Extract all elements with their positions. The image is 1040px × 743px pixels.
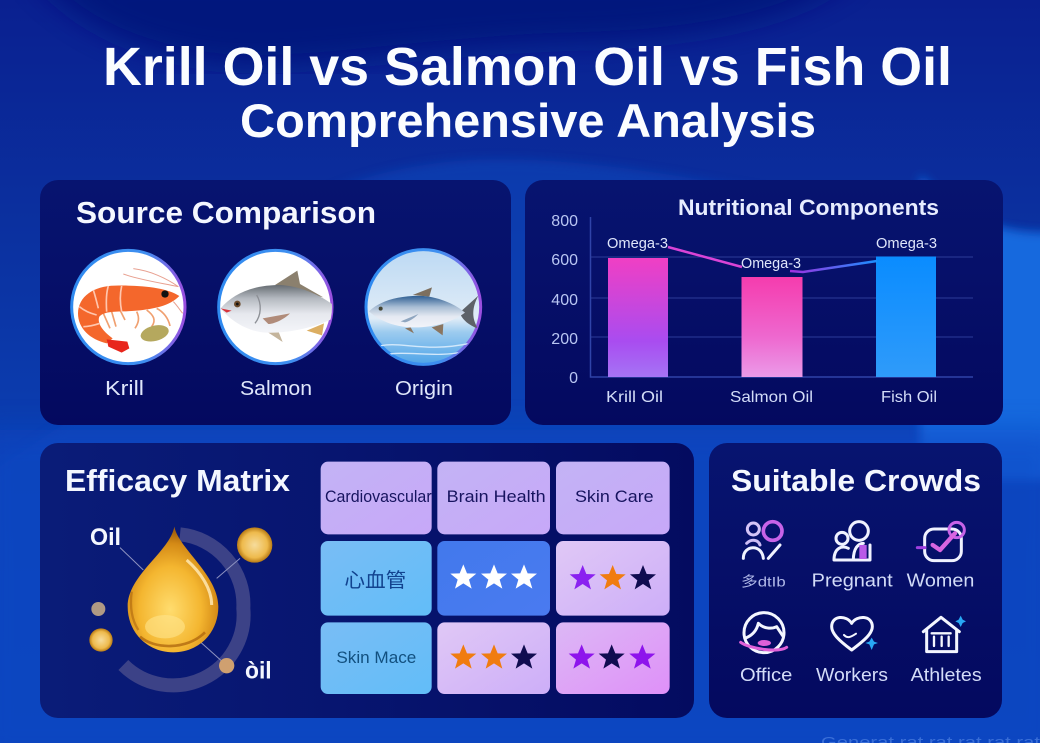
heading: efficacy matrix: Efficacy Matrix [65, 463, 291, 498]
y axis labels: 800 [551, 213, 578, 230]
matrix grid: Brain Health [447, 487, 546, 506]
label: workers: Workers [816, 664, 888, 685]
icon: home [923, 616, 966, 652]
label: office: Office [740, 664, 792, 685]
label: women: Women [907, 570, 974, 591]
omega-3 labels: Omega-3 [741, 256, 801, 272]
illustration: oil drop [89, 524, 272, 685]
x axis labels: Krill Oil [606, 389, 663, 406]
x axis labels [606, 389, 937, 406]
illustration: oil drop: òil [245, 657, 272, 684]
image: krill [72, 250, 185, 364]
x axis labels: Salmon Oil [730, 389, 813, 406]
panel: nutritional components [525, 180, 1003, 425]
label: athletes: Athletes [911, 664, 982, 685]
bar: fish oil [876, 256, 936, 377]
bar: salmon oil [742, 277, 802, 377]
heading: suitable crowds: Suitable Crowds [731, 463, 981, 498]
image: origin fish over sea [366, 250, 481, 364]
title: Comprehensive Analysis [240, 94, 816, 147]
matrix grid [321, 462, 670, 694]
omega-3 labels: Omega-3 [876, 236, 937, 252]
label: garbled crowd label: 多dtIb [741, 574, 786, 590]
title: Krill Oil vs Salmon Oil vs Fish Oil [103, 37, 952, 97]
label: krill: Krill [105, 378, 144, 400]
crowd icons [740, 522, 982, 685]
bar chart [551, 213, 973, 406]
heading: nutritional components: Nutritional Components [678, 195, 939, 220]
y axis labels: 600 [551, 252, 578, 269]
icon: women [917, 522, 964, 561]
icon: pregnant [834, 522, 870, 560]
panel: suitable crowds [709, 443, 1002, 718]
panel: efficacy matrix [40, 443, 694, 718]
icon: heart [832, 617, 878, 650]
y axis labels: 0 [569, 370, 578, 387]
y axis labels: 200 [551, 331, 578, 348]
matrix grid: 心血管 [344, 569, 406, 592]
label: salmon: Salmon [240, 378, 312, 400]
matrix grid: Cardiovascular [325, 487, 432, 506]
y axis labels [551, 213, 578, 387]
icon: face [741, 613, 787, 653]
panel: source comparison [40, 180, 511, 425]
heading: source comparison: Source Comparison [76, 195, 376, 230]
omega-3 labels [607, 236, 937, 272]
matrix grid: Skin Care [575, 487, 654, 506]
trend line [668, 247, 877, 272]
bar: krill oil [608, 258, 668, 377]
label: origin: Origin [395, 378, 453, 400]
image: salmon [219, 250, 333, 364]
y axis labels: 400 [551, 292, 578, 309]
illustration: oil drop: Oil [90, 524, 121, 551]
x axis labels: Fish Oil [881, 389, 937, 406]
label: pregnant: Pregnant [812, 570, 893, 591]
omega-3 labels: Omega-3 [607, 236, 668, 252]
title [103, 37, 952, 147]
icon: people with speech bubble [743, 522, 782, 558]
matrix grid: Skin Mace [336, 648, 416, 667]
